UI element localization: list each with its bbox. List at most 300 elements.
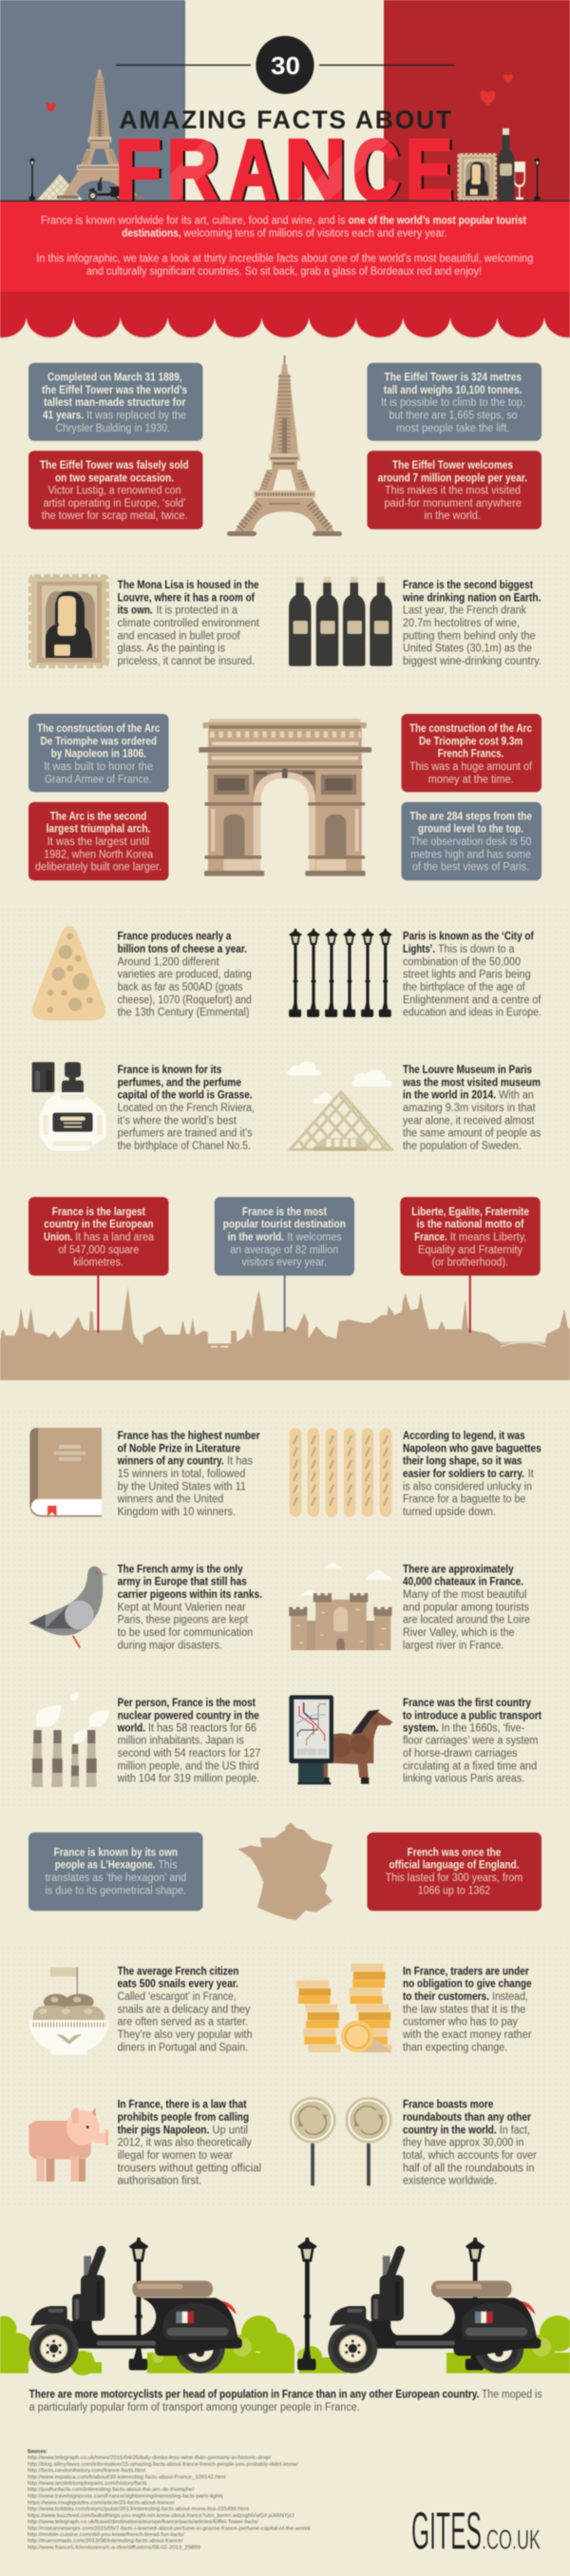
panel: Arc fact top left: De Triomphe was ordered [40, 736, 157, 747]
text: Mona Lisa: priceless, it cannot be insured. [118, 656, 255, 667]
text: baguettes: turned upside down. [403, 1507, 496, 1518]
icon: wine glass [513, 162, 525, 200]
text: roundabouts: roundabouts than any other [403, 2112, 531, 2124]
text: cheese [118, 932, 252, 1018]
text: sources list: Sources: [28, 2449, 48, 2454]
panel: Eiffel fact top left: Chrysler Building in 1930. [55, 423, 170, 434]
text: wine drinking: wine drinking nation on Earth. [402, 592, 541, 604]
text: chateaux: There are approximately [403, 1564, 514, 1575]
panel: left callout largest country: of 547,000 square [58, 1244, 139, 1256]
text: roundabouts: existence worldwide. [403, 2176, 497, 2187]
panel: Eiffel fact bottom right: in the world. [424, 510, 481, 522]
text: literature: 15 winners in total, followed [118, 1469, 245, 1480]
text: baguettes: France for a baguette to be [403, 1494, 525, 1506]
panel: right callout national motto: France. [414, 1232, 447, 1243]
text: baguettes: their long shape, so it was [403, 1456, 522, 1468]
text: chateaux: River Valley, which is the [403, 1627, 515, 1639]
panel: dotted row cheese, lights, perfume, Louvre [0, 906, 570, 1169]
panel: centre callout tourist destination [215, 1197, 354, 1333]
text: sources list: http://facts.randomhistory.com/france-facts.html [28, 2469, 145, 2474]
icon: baguettes [290, 1428, 391, 1517]
panel: Arc fact bottom left: deliberately built one larger. [35, 862, 162, 874]
panel: centre callout tourist destination: visitors every year. [241, 1257, 327, 1268]
icon: small Eiffel Tower [57, 64, 142, 199]
panel: Arc fact top right [401, 714, 542, 792]
text: change: than expecting change. [403, 2042, 507, 2053]
text: sources list: http://justfunfacts.com/interesting-facts-about-the-arc-de-triomphe/ [28, 2488, 195, 2493]
text: baguettes [403, 1431, 542, 1518]
scene: bushes [0, 2316, 570, 2375]
text: pigs: trousers without getting official [118, 2163, 261, 2174]
text: chateaux [403, 1564, 530, 1651]
text: public transport: France was the first country [403, 1698, 532, 1709]
panel: official language fact: This lasted for 300 years, from [386, 1873, 522, 1884]
text: snails [118, 1966, 253, 2053]
panel: Eiffel fact bottom right: The Eiffel Tower welcomes [392, 460, 513, 471]
text: Mona Lisa [118, 580, 260, 667]
text: cheese: France produces nearly a [118, 932, 232, 943]
panel: Eiffel fact top left: tallest man-made structure for [44, 397, 186, 409]
text: change: with the exact money rather [402, 2029, 532, 2041]
icon: small moped [88, 178, 125, 201]
title: FRANCE [115, 123, 456, 220]
text: Mona Lisa: Louvre, where it has a room of [118, 592, 255, 604]
text: Mona Lisa: glass. As the painting is [118, 644, 225, 655]
text: Louvre: The Louvre Museum in Paris [403, 1065, 532, 1076]
title: FRANCE: R [170, 123, 222, 220]
panel: Arc fact top left: Grand Armee of France. [45, 774, 152, 785]
text: chateaux: largest river in France. [403, 1640, 504, 1651]
panel: right callout national motto: Equality and Fraternity [418, 1244, 522, 1256]
title: FRANCE: N [288, 123, 350, 220]
icon: header lamp right [534, 158, 541, 201]
text: pigs: prohibits people from calling [118, 2112, 249, 2124]
icon: wine bottle [498, 128, 515, 200]
text: pigs [118, 2100, 261, 2187]
panel: Eiffel fact top right: but there are 1,665 steps, so [390, 411, 517, 422]
panel: L'Hexagone fact: is due to its geometrical shape. [46, 1885, 186, 1896]
text: public transport: In the 1660s, ‘five- [442, 1722, 524, 1734]
text: wine drinking: France is the second biggest [403, 580, 533, 591]
panel: Eiffel fact top right: The Eiffel Tower is 324 metres [384, 373, 522, 384]
text: pigeons: army in Europe that still has [118, 1577, 247, 1588]
text: pigeons: to be used for communication [118, 1627, 253, 1639]
text: Louvre: amazing 9.3m visitors in that [403, 1103, 536, 1114]
panel: official language fact: French was once the [408, 1847, 501, 1858]
text: sources list: http://www.telegraph.co.uk/news/2016/04/25/italy-drinks-less-wine-than-germany-in-historic-drop/ [28, 2455, 272, 2461]
icon: nuclear towers and smoke [31, 1692, 109, 1787]
panel: Arc fact top left: It was built to honor the [44, 761, 153, 773]
panel: Eiffel fact bottom right [367, 451, 542, 529]
text: Mona Lisa: climate controlled environment [118, 618, 260, 629]
icon: small Louvre pyramid [37, 174, 83, 200]
panel: Eiffel fact bottom left [28, 451, 203, 529]
icon: castle and clouds [289, 1563, 391, 1650]
panel: left callout largest country: kilometres. [73, 1257, 124, 1268]
text: perfume: the birthplace of Chanel No.5. [118, 1141, 251, 1152]
text: cheese: billion tons of cheese a year. [118, 944, 247, 955]
icon: Mona Lisa [31, 577, 106, 665]
panel: Arc fact top right: money at the time. [428, 774, 514, 785]
icon: hearts [47, 74, 513, 112]
text: Mona Lisa: and encased in bullet proof [118, 630, 240, 642]
text: sources list: http://www.boldsky.com/insync/pulse/2013/interesting-facts-about-mona-lisa-035496.html [28, 2507, 249, 2512]
panel: L'Hexagone fact: This [158, 1860, 178, 1872]
panel: right callout national motto: is the national motto of [416, 1220, 524, 1231]
panel: right callout national motto: It means Liberty, [450, 1232, 526, 1243]
title: FRANCE: C [352, 123, 400, 220]
title: FRANCE: F [115, 123, 162, 220]
text: nuclear: nuclear powered country in the [118, 1710, 259, 1721]
text: change: customer who has to pay [403, 2017, 518, 2028]
panel: Arc fact top right: French Francs. [438, 749, 504, 760]
text: pigeons: Paris, these pigeons are kept [118, 1615, 249, 1626]
text: public transport: floor carriages’ were a system [403, 1736, 538, 1747]
text: wine drinking: biggest wine-drinking country. [403, 656, 542, 667]
panel: Eiffel fact top left: 41 years. [43, 411, 84, 422]
title: FRANCE: R [167, 123, 218, 220]
panel: Arc fact bottom left: The Arc is the second [50, 811, 146, 822]
text: roundabouts: they have approx 30,000 in [403, 2138, 523, 2149]
text: Louvre: the population of Sweden. [403, 1141, 522, 1152]
panel: L'Hexagone fact: France is known by its own [54, 1847, 178, 1858]
text: nuclear: million inhabitants. Japan is [118, 1736, 244, 1747]
text: cheese: Around 1,200 different [118, 956, 219, 968]
text: snails: diners in Portugal and Spain. [118, 2042, 248, 2053]
text: city of lights [403, 932, 542, 1018]
panel: Arc fact top right: De Triomphe cost 9.3m [419, 736, 522, 747]
text: nuclear: million people, and the US third [118, 1760, 258, 1772]
text: wine drinking [402, 580, 542, 667]
text: sources list: https://www.roughguides.com/article/20-facts-about-france/ [28, 2500, 175, 2506]
panel: Eiffel fact top left: Completed on March 31 1889, [48, 373, 182, 384]
panel: Eiffel fact bottom right: paid-for monument anywhere [384, 498, 522, 509]
icon: wine bottles [289, 577, 392, 666]
text: sources list: http://www.expatica.com/fr/about/30-interesting-facts-about-France_109142.html [28, 2474, 226, 2480]
text: Louvre: in the world in 2014. [403, 1090, 496, 1102]
text: sources list [28, 2449, 311, 2550]
panel: Eiffel fact bottom left: artist operating in Europe, ‘sold’ [44, 498, 186, 509]
panel: Arc fact bottom right: metres high and has some [410, 849, 531, 860]
text: sources list: http://www.telegraph.co.uk/travel/destinations/europe/france/paris/articles/Eiffel-Tower-facts/ [28, 2520, 259, 2526]
panel: centre callout tourist destination: France is the most [242, 1206, 327, 1218]
text: literature: It has [227, 1456, 253, 1468]
text: city of lights: Paris is known as the ‘City of [403, 932, 534, 943]
title: FRANCE: A [233, 123, 281, 220]
text: pigeons: The French army is the only [118, 1564, 243, 1575]
panel: Arc fact bottom right [401, 802, 542, 880]
text: pigeons [118, 1564, 262, 1651]
panel: left callout largest country: Union. [44, 1232, 72, 1243]
text: sources list: https://www.buzzfeed.com/bullo/things-you-might-not-know-about-france?utm_term=.wdzvgNVwG#.jxXRNYjz2 [28, 2513, 294, 2519]
icon: cheese [32, 926, 105, 1020]
panel: Eiffel fact bottom right: around 7 million people per year. [378, 472, 527, 484]
panel: Eiffel fact bottom left: on two separate occasion. [55, 472, 174, 484]
title: FRANCE: N [284, 123, 347, 220]
text: nuclear: second with 54 reactors for 127 [118, 1748, 260, 1759]
text: snails: eats 500 snails every year. [118, 1979, 238, 1990]
icon: bottom lamps [129, 2238, 484, 2371]
text: wine drinking: putting them behind only the [403, 630, 536, 642]
title: FRANCE: E [408, 123, 456, 220]
panel: L'Hexagone fact: translates as ‘the hexagon’ and [46, 1873, 186, 1884]
text: public transport: to introduce a public transport [403, 1710, 542, 1721]
icon: moped left [29, 2250, 242, 2374]
text: Louvre: the same amount of people as [403, 1128, 542, 1140]
text: snails: Called ‘escargot’ in France, [118, 1991, 237, 2003]
text: cheese: the 13th Century (Emmental) [118, 1007, 250, 1018]
text: Louvre: year alone, it received almost [403, 1115, 535, 1126]
text: motorcyclists fact: a particularly popular form of transport among younger people in France. [29, 2402, 360, 2413]
panel: dotted rows book to nuclear [0, 1407, 570, 1806]
title: amazing facts about: AMAZING FACTS ABOUT [120, 106, 451, 134]
text: pigeons: during major disasters. [118, 1640, 222, 1651]
text: change: to their customers. [403, 1991, 489, 2003]
panel: Arc fact bottom right: The observation desk is 50 [410, 836, 532, 848]
icon: moped right [328, 2250, 541, 2374]
text: wine drinking: 20.7m hectolitres of wine, [403, 618, 520, 629]
panel: Arc fact bottom right: The are 284 steps from the [409, 811, 532, 822]
panel: Arc fact bottom left: 1982, when North Korea [44, 849, 154, 860]
icon: Louvre pyramid and clouds [287, 1062, 394, 1151]
panel: Eiffel fact top right: tall and weighs 10,100 tonnes. [384, 385, 522, 396]
text: pigs: 2012, it was also theoretically [118, 2138, 252, 2149]
text: chateaux: are located around the Loire [403, 1615, 530, 1626]
icon: stacks of coins [296, 1964, 391, 2052]
icon: Arc de Triomphe [199, 719, 371, 876]
number 30 badge [116, 36, 454, 94]
panel: left callout largest country: France is the largest [52, 1206, 145, 1218]
text: change: Instead, [492, 1991, 528, 2003]
panel: left callout largest country: country in the European [44, 1220, 153, 1231]
text: baguettes: is also considered unlucky in [403, 1481, 532, 1492]
intro text [36, 215, 533, 278]
panel: Arc fact top left [28, 714, 169, 792]
panel: Eiffel fact bottom right: This makes it the most visited [385, 486, 521, 497]
intro text: destinations, [122, 228, 181, 240]
panel: right callout national motto: (or brotherhood). [432, 1257, 508, 1268]
text: chateaux: and popular among tourists [403, 1602, 529, 1613]
text: cheese: cheese), 1070 (Roquefort) and [118, 994, 252, 1006]
text: roundabouts: country in the world. [403, 2124, 497, 2136]
text: wine drinking: United States (30.1m) as the [403, 644, 532, 655]
icon: header lamp left [29, 158, 35, 201]
panel: Arc fact top left: The construction of the Arc [37, 723, 161, 735]
text: sources list: http://roseannetangrs.com/2015/05/7-facts-i-learned-about-perfume-in-grasse-france-perfume-capital-of-the-world/ [28, 2526, 311, 2531]
text: nuclear: with 104 for 319 million people. [117, 1774, 259, 1785]
header flag background [0, 0, 570, 201]
panel: L'Hexagone fact: people as L’Hexagone. [55, 1860, 155, 1872]
panel: right callout national motto: Liberte, Egalite, Fraternite [411, 1206, 529, 1218]
text: roundabouts [403, 2100, 537, 2187]
text: snails: The average French citizen [118, 1966, 238, 1977]
panel: Eiffel fact top left [28, 363, 203, 441]
text: chateaux: 40,000 chateaux in France. [403, 1577, 523, 1588]
text: Louvre: was the most visited museum [402, 1077, 541, 1088]
text: city of lights: street lights and Paris being [403, 970, 531, 981]
text: Louvre [402, 1065, 542, 1152]
text: Mona Lisa: its own. [118, 606, 153, 617]
text: city of lights: education and ideas in Europe. [403, 1007, 542, 1018]
text: sources list: http://www.france5.fr/emissions/c-a-dire/diffusions/08-02-2013_29899 [28, 2545, 200, 2550]
panel: L'Hexagone fact [28, 1833, 203, 1911]
intro text: and culturally significant countries. So sit back, grab a glass of Bordeaux red and enjoy! [86, 266, 482, 278]
panel: official language fact [367, 1833, 542, 1911]
panel: official language fact: 1066 up to 1362 [418, 1885, 490, 1896]
text: public transport: circulating at a fixed time and [403, 1760, 537, 1772]
text: nuclear: Per person, France is the most [118, 1698, 256, 1709]
icon: book [29, 1428, 102, 1517]
intro text: welcoming tens of millions of visitors each and every year. [182, 228, 447, 240]
panel: left callout largest country [28, 1197, 169, 1333]
text: pigeons: carrier pigeons within its ranks. [118, 1589, 262, 1601]
panel: centre callout tourist destination: in the world. [228, 1232, 284, 1243]
text: pigs: illegal for women to wear [118, 2150, 233, 2162]
icon: horse and metro map kiosk [289, 1695, 392, 1784]
icon: street lamps [289, 929, 392, 1017]
panel: centre callout tourist destination: an average of 82 million [230, 1244, 338, 1256]
panel: Arc fact top left: by Napoleon in 1806. [51, 749, 146, 760]
text: change [402, 1966, 532, 2053]
text: public transport: linking various Paris areas. [403, 1774, 524, 1785]
logo: Gites.co.uk: GITES [411, 2500, 482, 2561]
panel: dotted rows snails to roundabouts [0, 1942, 570, 2205]
text: city of lights: Lights’. [403, 944, 435, 955]
panel: Arc fact bottom right: ground level to the top. [418, 824, 523, 836]
text: literature: winners and the United [117, 1494, 223, 1506]
panel: Arc fact bottom left [28, 802, 169, 880]
text: literature: France has the highest number [118, 1431, 260, 1442]
panel: centre callout tourist destination: popular tourist destination [223, 1220, 346, 1231]
icon: roundabout signs [290, 2097, 391, 2185]
text: Mona Lisa: The Mona Lisa is housed in the [118, 580, 258, 591]
text: literature [117, 1431, 260, 1518]
panel: Eiffel fact top right: It is possible to climb to the top, [381, 397, 525, 409]
text: roundabouts: In fact, [500, 2124, 530, 2136]
text: public transport [403, 1698, 542, 1785]
text: snails: are often served as a starter. [118, 2017, 248, 2028]
intro text: France is known worldwide for its art, culture, food and wine, and is [41, 215, 346, 226]
text: snails: They’re also very popular with [118, 2029, 253, 2041]
text: pigs: Up until [213, 2124, 248, 2136]
intro text: In this infographic, we take a look at thirty incredible facts about one of the world’s most beautiful, welcoming [36, 253, 533, 264]
panel: red intro band [0, 201, 570, 339]
text: perfume: capital of the world is Grasse. [118, 1090, 253, 1102]
text: motorcyclists fact [29, 2389, 542, 2413]
panel: Arc fact top right: This was a huge amount of [409, 761, 533, 773]
panel: Arc fact bottom left: It was the largest until [48, 836, 149, 848]
text: literature: by the United States with 11 [118, 1481, 246, 1492]
text: roundabouts: France boasts more [403, 2100, 493, 2111]
text: public transport: of horse-drawn carriages [403, 1748, 518, 1759]
text: literature: winners of any country. [117, 1456, 224, 1468]
title: FRANCE: F [119, 123, 165, 220]
text: cheese: back as far as 500AD (goats [118, 982, 243, 993]
panel: Eiffel fact top left: the Eiffel Tower was the world’s [42, 385, 187, 396]
icon: Eiffel Tower [227, 356, 342, 536]
text: sources list: http://mobile-cuisine.com/did-you-know/french-bread-fun-facts/ [28, 2532, 185, 2538]
text: baguettes: Napoleon who gave baguettes [403, 1443, 542, 1454]
text: baguettes: easier for soldiers to carry. [403, 1469, 524, 1480]
text: chateaux: Many of the most beautiful [403, 1589, 526, 1601]
text: roundabouts: half of all the roundabouts in [403, 2163, 534, 2174]
panel: left callout largest country: It has a land area [75, 1232, 155, 1243]
text: city of lights: the birthplace of the age of [403, 982, 525, 993]
text: baguettes: It [528, 1469, 535, 1480]
panel: Eiffel fact top right: most people take the lift. [396, 423, 509, 434]
text: city of lights: Enlightenment and a centre of [403, 994, 542, 1006]
panel: Eiffel fact top right [367, 363, 542, 441]
text: pigs: their pigs Napoleon. [118, 2124, 209, 2136]
text: pigs: In France, there is a law that [118, 2100, 247, 2111]
text: literature: of Noble Prize in Literature [118, 1443, 240, 1454]
text: sources list: http://www.travelsignposts.com/France/sightseeing/interesting-facts-paris-lights [28, 2494, 223, 2500]
number 30 badge: 30 [271, 51, 300, 80]
text: motorcyclists fact: The moped is [482, 2389, 542, 2400]
icon: pigeon [29, 1567, 108, 1647]
icon: bowl of snails [28, 1967, 109, 2055]
text: city of lights: combination of the 50,000 [403, 956, 521, 968]
text: nuclear: It has 58 reactors for 66 [148, 1722, 256, 1734]
text: perfume: perfumers are trained and it’s [118, 1128, 253, 1140]
title: FRANCE: C [356, 123, 403, 220]
panel: centre callout tourist destination: It welcomes [287, 1232, 342, 1243]
text: change: no obligation to give change [403, 1979, 532, 1990]
icon: small Mona Lisa [459, 155, 496, 200]
text: Louvre: With an [499, 1090, 534, 1102]
text: change: the law states that it is the [403, 2004, 525, 2015]
panel: Eiffel fact bottom left: the tower for scrap metal, twice. [42, 510, 187, 522]
text: snails: snails are a delicacy and they [118, 2004, 251, 2015]
panel: right callout national motto [400, 1197, 541, 1333]
text: nuclear [117, 1698, 260, 1785]
text: perfume: perfumes, and the perfume [118, 1077, 241, 1088]
text: wine drinking: Last year, the French drank [403, 606, 526, 617]
text: sources list: http://www.arcdetriompheparis.com/history/facts [28, 2481, 147, 2487]
text: sources list: http://truenomads.com/2013/08/interesting-facts-about-france/ [28, 2539, 183, 2545]
text: nuclear: world. [117, 1722, 145, 1734]
panel: Eiffel fact bottom left: Victor Lustig, a renowned con [48, 486, 180, 497]
text: perfume: Located on the French Riviera, [118, 1103, 255, 1114]
text: cheese: varieties are produced, dating [118, 970, 252, 981]
text: motorcyclists fact: There are more motorcyclists per head of population in France than in any other European country. [29, 2389, 479, 2400]
panel: Arc fact bottom left: largest triumphal arch. [47, 824, 150, 836]
text: baguettes: According to legend, it was [403, 1431, 525, 1442]
icon: pig [28, 2107, 108, 2182]
text: pigeons: Kept at Mount Valerien near [118, 1602, 246, 1613]
panel: Arc fact top right: The construction of the Arc [409, 723, 533, 735]
panel: official language fact: official language of England. [390, 1860, 519, 1872]
text: Mona Lisa: It is protected in a [156, 606, 238, 617]
text: change: In France, traders are under [403, 1966, 529, 1977]
title: FRANCE: A [230, 123, 278, 220]
panel: Eiffel fact bottom left: The Eiffel Tower was falsely sold [40, 460, 189, 471]
title: FRANCE: E [405, 123, 453, 220]
text: city of lights: This is down to a [438, 944, 515, 955]
panel: Eiffel fact top left: It was replaced by the [86, 411, 186, 422]
text: roundabouts: total, which accounts for over [403, 2150, 537, 2162]
text: sources list: http://blog.allmyfaves.com/information/15-amazing-facts-about-france-french-people-you-probably-didnt-know/ [28, 2462, 298, 2468]
icon: map of France [238, 1822, 332, 1920]
icon: Paris skyline [0, 1286, 570, 1380]
panel: Arc fact bottom right: of the best views of Paris. [412, 862, 529, 874]
text: pigs: authorisation first. [118, 2176, 201, 2187]
text: perfume: it’s where the world’s best [118, 1115, 238, 1126]
text: perfume [118, 1065, 255, 1152]
intro text: one of the world’s most popular tourist [349, 215, 526, 226]
text: literature: Kingdom with 10 winners. [118, 1507, 236, 1518]
text: public transport: system. [403, 1722, 439, 1734]
